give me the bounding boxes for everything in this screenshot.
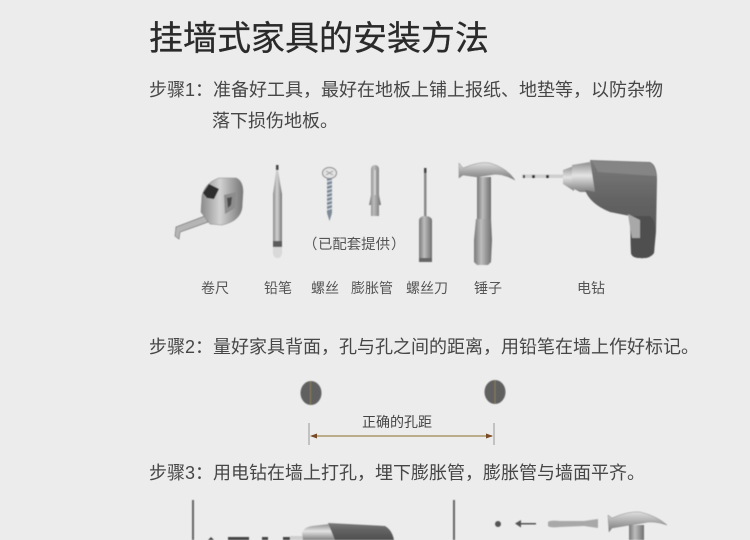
step 3 text: 步骤3：用电钻在墙上打孔，埋下膨胀管，膨胀管与墙面平齐。 xyxy=(149,463,645,483)
tool labels: 螺丝刀 xyxy=(406,280,448,296)
icon: tape measure xyxy=(175,178,243,239)
tool labels: 锤子 xyxy=(474,280,502,296)
tool labels: 膨胀管 xyxy=(351,280,393,296)
bracket note: ） xyxy=(391,236,405,253)
tool labels: 电钻 xyxy=(577,280,605,296)
bracket note: （ xyxy=(303,237,317,253)
icon: pencil xyxy=(273,165,282,258)
hammer xyxy=(608,512,667,540)
tool labels xyxy=(201,280,605,296)
tools illustration xyxy=(175,160,657,265)
step 2 text: 步骤2：量好家具背面，孔与孔之间的距离，用铅笔在墙上作好标记。 xyxy=(149,337,699,357)
title: 挂墙式家具的安装方法 xyxy=(149,20,489,58)
tool labels: 卷尺 xyxy=(201,280,229,296)
icon: screw xyxy=(322,168,336,221)
bracket note: 已配套提供 xyxy=(318,236,390,253)
anchor xyxy=(548,519,598,528)
step 3 illustration: anchor and hammer xyxy=(453,500,667,540)
step 3 illustration: drilling xyxy=(192,500,394,540)
icon: hammer xyxy=(459,163,515,265)
hole distance diagram xyxy=(300,380,506,445)
step 1 text xyxy=(149,80,663,131)
distance arrow xyxy=(309,423,494,445)
distance label: 正确的孔距 xyxy=(362,414,432,430)
left hole xyxy=(300,381,322,405)
right hole xyxy=(484,380,506,404)
tool labels: 螺丝 xyxy=(311,280,339,296)
step 1 text: 步骤1：准备好工具，最好在地板上铺上报纸、地垫等，以防杂物 xyxy=(149,80,663,100)
icon: screwdriver xyxy=(419,168,432,262)
icon: drill xyxy=(522,160,657,258)
step 1 text: 落下损伤地板。 xyxy=(212,111,338,131)
tool labels: 铅笔 xyxy=(264,280,292,296)
arrow xyxy=(515,520,536,528)
icon: wall anchor xyxy=(369,165,381,216)
